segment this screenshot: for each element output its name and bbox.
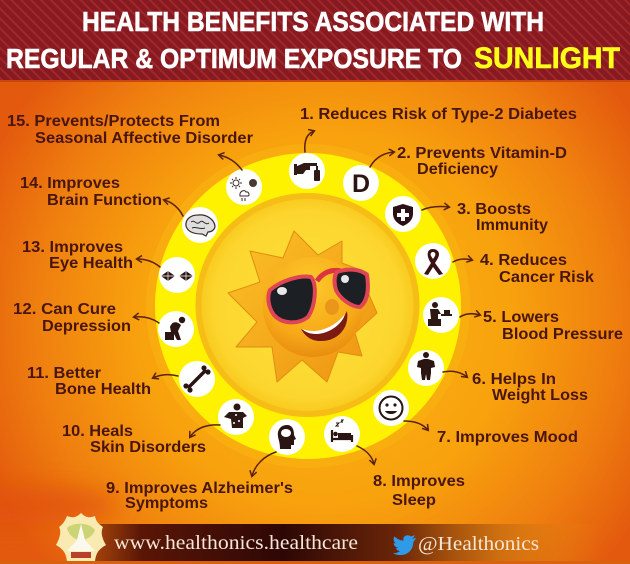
label 6 <box>472 371 588 404</box>
title <box>6 6 620 75</box>
nose <box>325 299 339 315</box>
label 13 <box>22 239 133 272</box>
label 1: 1. Reduces Risk of Type-2 Diabetes <box>300 106 577 123</box>
label 12: 12. Can Cure <box>13 301 116 318</box>
smile <box>301 311 347 341</box>
icon 13: eyes <box>159 257 195 293</box>
icon 11: bone <box>179 361 215 397</box>
label 2: Deficiency <box>417 161 498 178</box>
label 15: Seasonal Affective Disorder <box>35 130 253 147</box>
sun ring <box>146 144 470 468</box>
label 8: 8. Improves <box>373 473 465 490</box>
label 11 <box>27 365 151 398</box>
label 2 <box>397 145 567 178</box>
label 15: 15. Prevents/Protects From <box>7 113 220 130</box>
label 10: Skin Disorders <box>90 439 206 456</box>
sun character <box>228 231 377 382</box>
icon 1: hand and sunscreen <box>289 153 325 189</box>
icon 6: person weight <box>408 350 444 386</box>
label 3 <box>457 201 548 234</box>
label 9 <box>106 480 293 512</box>
icon 14: brain <box>182 207 218 243</box>
label 14: 14. Improves <box>20 175 120 192</box>
label 12 <box>13 301 131 335</box>
label 4: 4. Reduces <box>480 252 567 269</box>
label 7: 7. Improves Mood <box>437 429 578 446</box>
twitter handle: @Healthonics <box>418 533 539 555</box>
label 9: 9. Improves Alzheimer's <box>106 480 293 497</box>
label 5: Blood Pressure <box>502 326 623 343</box>
label 5: 5. Lowers <box>483 309 559 326</box>
label 13: Eye Health <box>49 255 133 272</box>
label 4 <box>480 252 594 286</box>
icon 8: bed <box>324 416 360 452</box>
bottom edge strip <box>0 561 630 564</box>
label 12: Depression <box>42 318 131 335</box>
icon 2: letter D <box>343 165 379 201</box>
label 6: Weight Loss <box>492 387 588 404</box>
icon 2: letter D: D <box>352 170 370 198</box>
label 8 <box>373 473 465 509</box>
title: HEALTH BENEFITS ASSOCIATED WITH <box>82 6 544 37</box>
label 4: Cancer Risk <box>499 269 594 286</box>
label 2: 2. Prevents Vitamin-D <box>397 145 567 162</box>
icon 3: shield <box>385 196 421 232</box>
title: SUNLIGHT <box>474 42 620 75</box>
icon 12: depressed person <box>158 311 194 347</box>
label 6: 6. Helps In <box>472 371 556 388</box>
label 13: 13. Improves <box>22 239 123 256</box>
label 3: 3. Boosts <box>457 201 531 218</box>
header band <box>0 0 630 82</box>
label 3: Immunity <box>476 217 548 234</box>
label 10 <box>62 423 206 456</box>
icon 15: seasons <box>226 169 262 205</box>
label 11: 11. Better <box>27 365 101 382</box>
label 10: 10. Heals <box>62 423 133 440</box>
label 5 <box>483 309 623 343</box>
sunglasses <box>268 270 368 322</box>
label 15 <box>7 113 253 147</box>
icon 4: ribbon <box>415 243 451 279</box>
title: REGULAR & OPTIMUM EXPOSURE TO <box>6 43 462 74</box>
icon: twitter bird <box>393 535 416 555</box>
arrows <box>134 131 480 476</box>
icon 10: skin disorder person <box>218 399 254 435</box>
logo <box>56 513 106 561</box>
icon 5: blood pressure check <box>423 297 459 333</box>
label 11: Bone Health <box>55 381 151 398</box>
footer band <box>90 524 600 561</box>
label 14: Brain Function <box>47 192 162 209</box>
website: www.healthonics.healthcare <box>114 532 358 554</box>
icon 7: smiley <box>373 390 409 426</box>
icon 9: head with brain <box>269 419 305 455</box>
label 9: Symptoms <box>125 495 208 512</box>
label 14 <box>20 175 162 209</box>
label 8: Sleep <box>392 492 436 509</box>
